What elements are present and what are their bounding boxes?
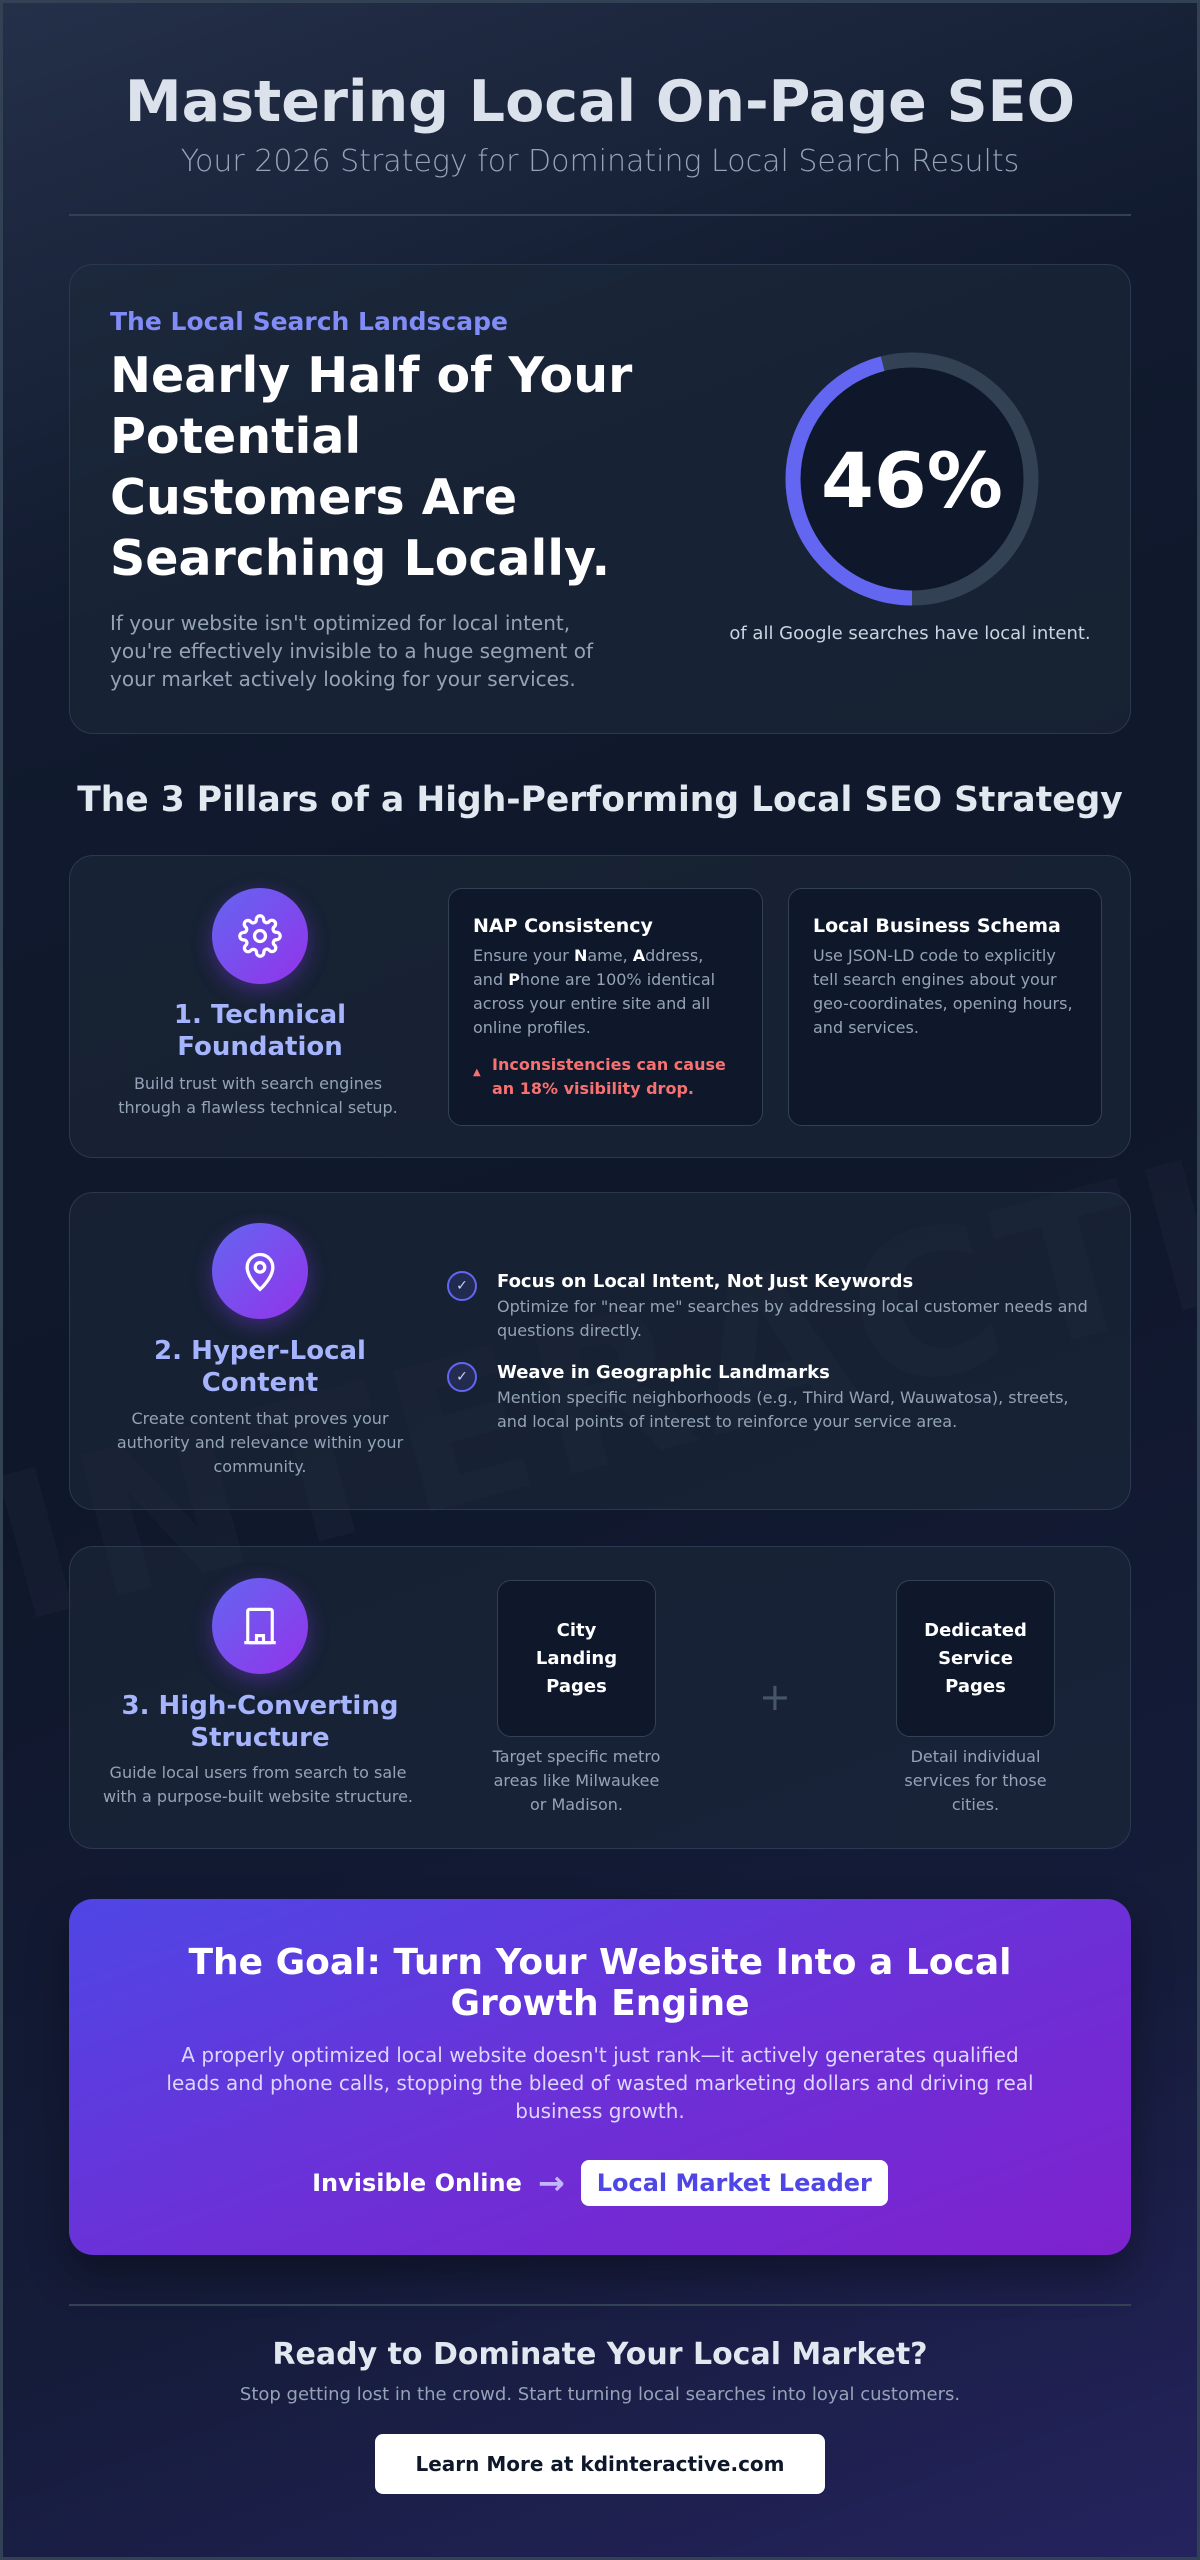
card: NAP consistency: NAP Consistency bbox=[473, 915, 653, 937]
panel: pillar 3 bbox=[69, 1546, 1131, 1849]
pillar title: Structure bbox=[190, 1723, 330, 1753]
panel: the goal bbox=[69, 1899, 1131, 2255]
goal heading: The Goal: Turn Your Website Into a Local Growth Engine bbox=[188, 1942, 1012, 2024]
pillar description: Guide local users from search to sale with a purpose-built website structure. bbox=[103, 1763, 413, 1806]
checklist item 2 bbox=[447, 1362, 1069, 1431]
cta button: Learn More at kdinteractive.com bbox=[415, 2452, 785, 2476]
card: local business schema bbox=[788, 888, 1102, 1126]
card: local business schema: Local Business Schema bbox=[813, 915, 1061, 937]
icon: plus: + bbox=[759, 1675, 791, 1719]
panel: pillar 2 bbox=[69, 1192, 1131, 1510]
paragraph: If your website isn't optimized for local intent, you're effectively invisible to a huge segment of your market actively looking for your services. bbox=[110, 611, 593, 691]
donut chart: 46% bbox=[786, 352, 1038, 606]
box: city landing pages bbox=[497, 1580, 656, 1737]
goal paragraph: A properly optimized local website doesn't just rank—it actively generates qualified leads and phone calls, stopping the bleed of wasted marketing dollars and driving real business growth. bbox=[166, 2043, 1034, 2123]
warning callout: ▲ bbox=[473, 1067, 481, 1078]
pillar title: Foundation bbox=[177, 1032, 343, 1062]
icon: gear bbox=[212, 888, 308, 984]
box: dedicated service pages: Service bbox=[938, 1648, 1013, 1668]
checklist item 1 bbox=[447, 1271, 1088, 1340]
pillar title: 1. Technical bbox=[174, 1000, 346, 1030]
icon: map pin bbox=[212, 1223, 308, 1319]
checklist item 1: Focus on Local Intent, Not Just Keywords bbox=[497, 1271, 913, 1292]
badge: Local Market Leader bbox=[597, 2169, 872, 2197]
panel: local search landscape bbox=[69, 264, 1131, 734]
checklist item 2: ✓ bbox=[456, 1369, 468, 1385]
card: local business schema: Use JSON-LD code to explicitly tell search engines about your geo-coordinates, opening hours, and services. bbox=[813, 946, 1073, 1037]
card: NAP consistency bbox=[448, 888, 763, 1126]
checklist item 2: Weave in Geographic Landmarks bbox=[497, 1362, 830, 1383]
pillar description: Create content that proves your authority and relevance within your community. bbox=[117, 1409, 403, 1476]
box: city landing pages: Pages bbox=[546, 1676, 607, 1696]
panel: pillar 1 bbox=[69, 855, 1131, 1158]
eyebrow: The Local Search Landscape bbox=[110, 307, 508, 336]
title: Mastering Local On-Page SEO bbox=[125, 69, 1075, 135]
box: city landing pages: Landing bbox=[536, 1648, 617, 1668]
donut chart: 46%: 46% bbox=[821, 436, 1003, 525]
pillar title: Content bbox=[202, 1368, 318, 1398]
pillar title: 3. High-Converting bbox=[122, 1691, 398, 1721]
checklist item 1: ✓ bbox=[456, 1278, 468, 1294]
warning callout: Inconsistencies can cause an 18% visibility drop. bbox=[492, 1055, 726, 1098]
transformation row bbox=[312, 2160, 888, 2206]
card: NAP consistency: Ensure your Name, Address, and Phone are 100% identical across your entire site and all online profiles. bbox=[473, 946, 715, 1037]
badge bbox=[581, 2160, 888, 2206]
donut caption: of all Google searches have local intent. bbox=[729, 623, 1091, 644]
caption: Target specific metro areas like Milwaukee or Madison. bbox=[493, 1747, 660, 1814]
pillar title bbox=[174, 1000, 346, 1062]
caption: Detail individual services for those cities. bbox=[904, 1747, 1047, 1814]
box: dedicated service pages: Dedicated bbox=[924, 1620, 1027, 1640]
section heading: The 3 Pillars of a High-Performing Local SEO Strategy bbox=[77, 780, 1123, 820]
cta heading: Ready to Dominate Your Local Market? bbox=[272, 2337, 928, 2372]
pillar title: 2. Hyper-Local bbox=[154, 1336, 366, 1366]
pillar description: Build trust with search engines through a flawless technical setup. bbox=[118, 1074, 398, 1117]
box: dedicated service pages: Pages bbox=[945, 1676, 1006, 1696]
checklist item 1: Optimize for "near me" searches by addressing local customer needs and questions directly. bbox=[497, 1297, 1088, 1340]
box: city landing pages: City bbox=[557, 1620, 596, 1640]
pillar title bbox=[122, 1691, 398, 1753]
box: dedicated service pages bbox=[896, 1580, 1055, 1737]
checklist item 2: Mention specific neighborhoods (e.g., Third Ward, Wauwatosa), streets, and local points of interest to reinforce your service area. bbox=[497, 1388, 1069, 1431]
transformation row: Invisible Online bbox=[312, 2169, 522, 2197]
cta subtext: Stop getting lost in the crowd. Start turning local searches into loyal customers. bbox=[240, 2384, 960, 2405]
headline: Nearly Half of Your Potential Customers Are Searching Locally. bbox=[110, 347, 632, 587]
subtitle: Your 2026 Strategy for Dominating Local Search Results bbox=[181, 144, 1019, 179]
arrow: → bbox=[538, 2164, 565, 2202]
pillar title bbox=[154, 1336, 366, 1398]
icon: building bbox=[212, 1578, 308, 1674]
cta button bbox=[375, 2434, 825, 2494]
